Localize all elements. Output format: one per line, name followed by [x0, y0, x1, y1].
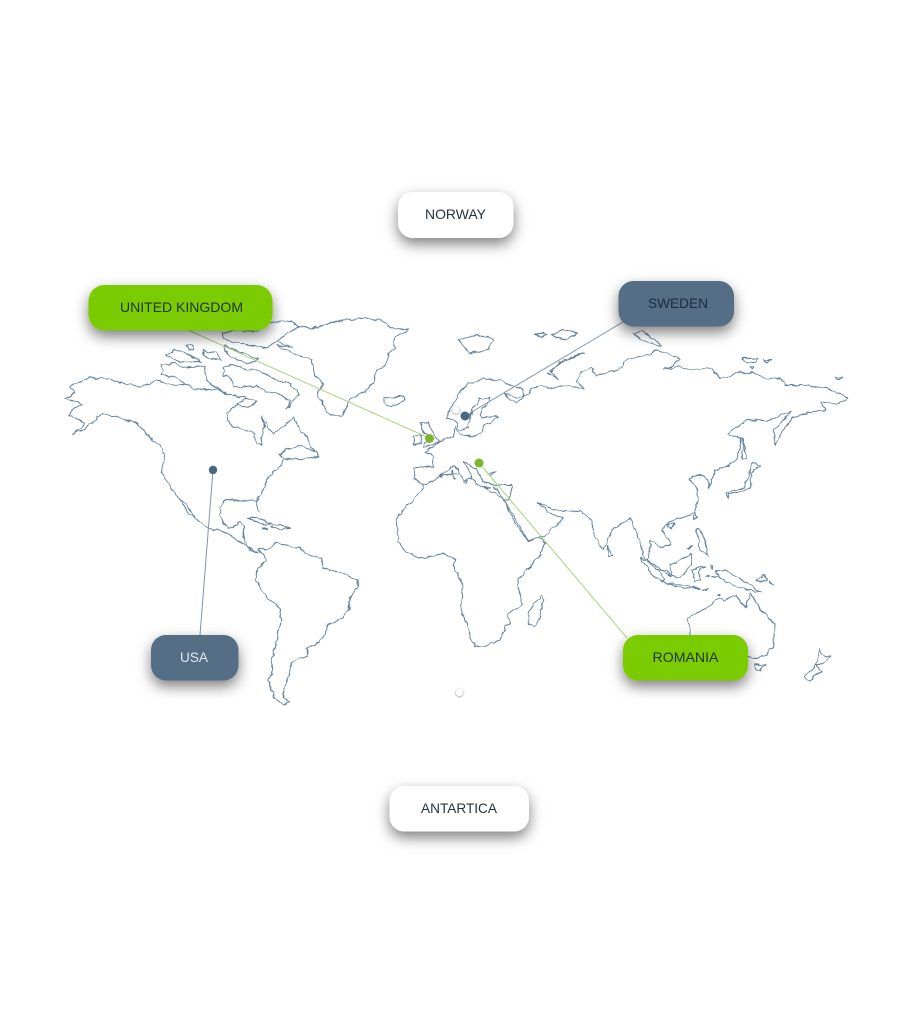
iceland — [383, 395, 405, 406]
label: romania: ROMANIA — [652, 649, 719, 665]
greenland — [277, 318, 408, 417]
label: sweden: SWEDEN — [648, 295, 708, 311]
label: sweden — [618, 281, 734, 326]
connector: sweden — [465, 322, 623, 416]
southeast asia and australasia — [639, 545, 831, 681]
marker: romania — [474, 458, 484, 468]
europe and asia islands — [413, 330, 843, 556]
label: antartica — [390, 786, 529, 832]
europe and asia mainland — [414, 350, 848, 577]
marker: white dot south — [456, 689, 463, 696]
label: romania — [623, 635, 748, 680]
marker: usa — [209, 466, 217, 474]
marker: united kingdom — [425, 434, 434, 443]
label: united kingdom — [88, 285, 272, 330]
americas north: mainland and arctic islands — [65, 322, 318, 552]
connector: united kingdom — [188, 330, 429, 438]
marker: white dot norway — [452, 406, 460, 414]
africa and madagascar — [397, 474, 545, 647]
label: united kingdom: UNITED KINGDOM — [120, 299, 243, 315]
connector: romania — [479, 463, 627, 638]
label: usa: USA — [180, 649, 209, 665]
label: norway — [398, 192, 514, 238]
connector: usa — [200, 470, 213, 635]
marker: sweden — [460, 412, 470, 420]
caribbean islands and south america — [180, 500, 358, 705]
label: usa — [151, 635, 238, 680]
world map — [65, 318, 848, 705]
label: norway: NORWAY — [425, 206, 487, 222]
label: antartica: ANTARTICA — [421, 800, 498, 816]
